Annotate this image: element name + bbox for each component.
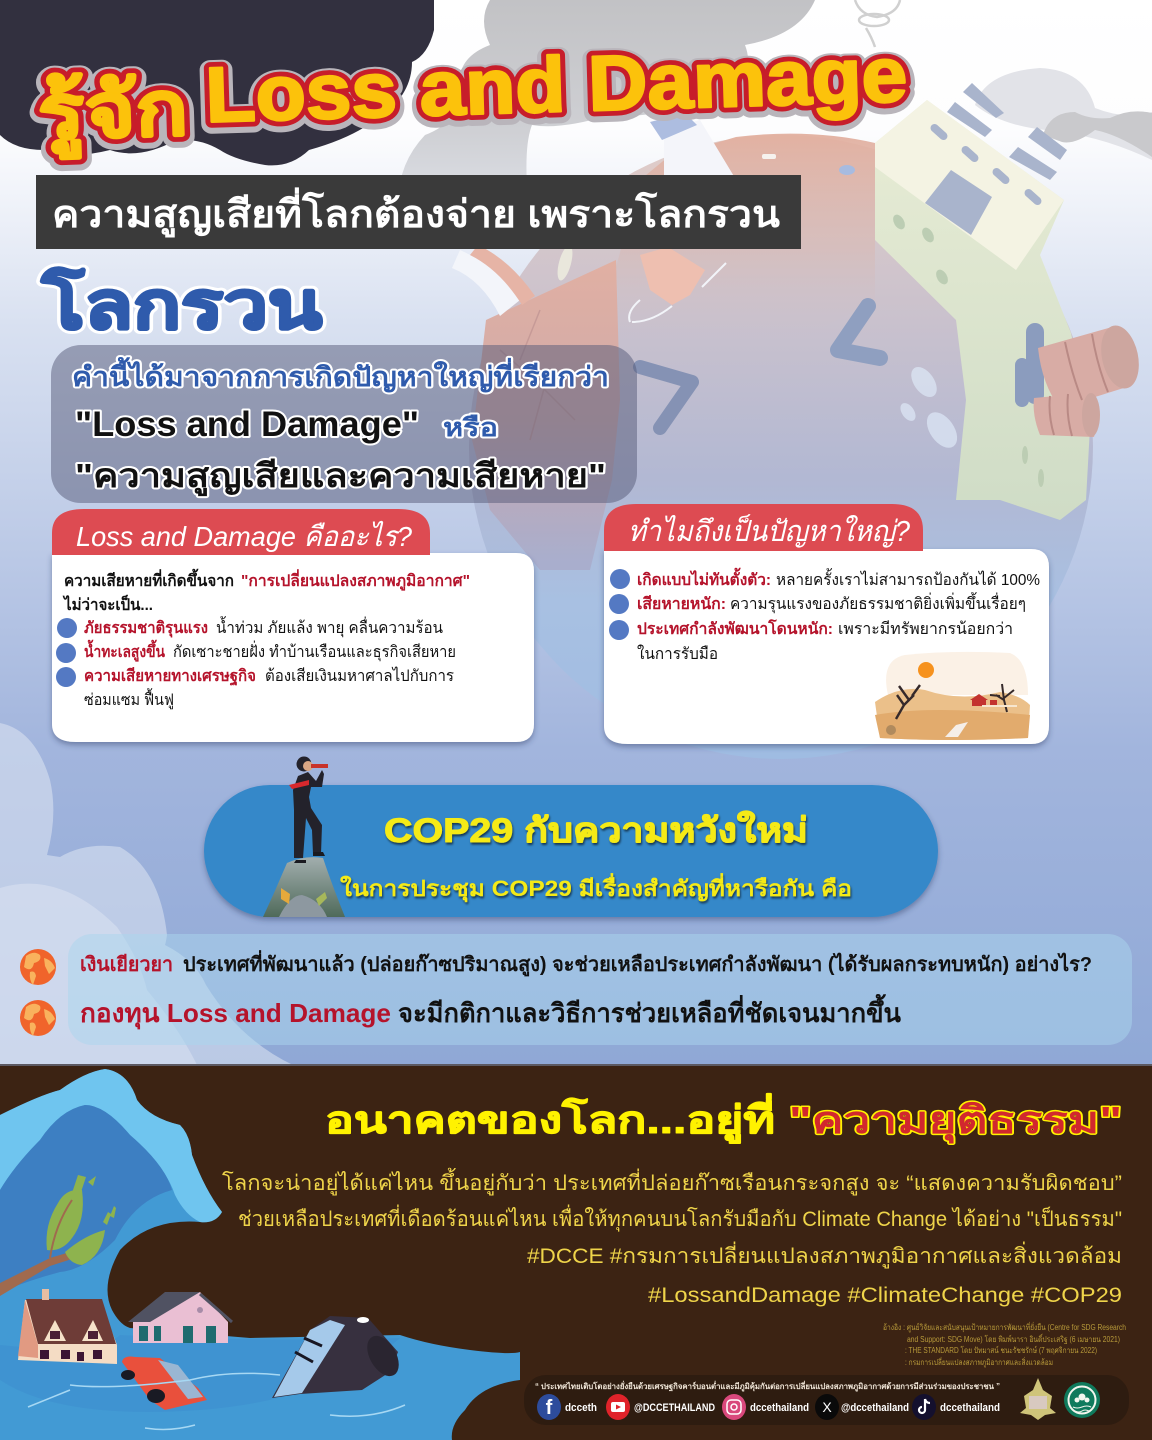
tree (0, 1175, 116, 1296)
icon: youtube (606, 1394, 630, 1420)
panel: why it is a big problem: ความรุนแรงของภัยธรรมชาติยิ่งเพิ่มขึ้นเรื่อยๆ (730, 592, 1026, 614)
icon: department seal (1064, 1382, 1100, 1418)
references (883, 1321, 1126, 1368)
panel: intro: หรือ (443, 414, 498, 442)
heading: global boiling: โลกรวน (41, 266, 322, 342)
title: Loss and Damage (204, 30, 908, 139)
icon: globe 2 (20, 1000, 56, 1036)
highlights on globe (897, 362, 963, 453)
card (52, 553, 534, 742)
panel: what is loss and damage: ความเสียหายทางเศรษฐกิจ (84, 666, 256, 686)
panel: COP29 topics: เงินเยียวยา (80, 953, 173, 976)
globe (452, 83, 1144, 759)
title: รู้จัก (37, 68, 189, 162)
factory marks (925, 83, 1067, 235)
panel: why it is a big problem: ประเทศกำลังพัฒนาโดนหนัก: (637, 618, 833, 638)
footer bar: dcceth (565, 1402, 597, 1414)
icon: tornado (855, 0, 900, 47)
background (0, 0, 1152, 1070)
footer bar: “ ประเทศไทยเติบโตอย่างยั่งยืนด้วยเศรษฐกิจคาร์บอนต่ำและมีภูมิคุ้มกันต่อการเปลี่ยนแปลงสภาพภูมิอากาศด้วยการมีส่วนร่วมของประชาชน ” (535, 1380, 1000, 1392)
heading (325, 1093, 1122, 1144)
body text: ช่วยเหลือประเทศที่เดือดร้อนแค่ไหน เพื่อให้ทุกคนบนโลกรับมือกับ Climate Change ได้อย่าง "เป็นธรรม" (238, 1204, 1122, 1232)
panel: what is loss and damage: ภัยธรรมชาติรุนแรง (84, 619, 208, 638)
footer bar: @DCCETHAILAND (634, 1402, 715, 1414)
panel: what is loss and damage: ต้องเสียเงินมหาศาลไปกับการ (265, 666, 454, 685)
card (604, 549, 1049, 744)
title: Loss and Damage (204, 30, 908, 139)
panel: why it is a big problem: ทำไมถึงเป็นปัญหาใหญ่? (628, 514, 911, 548)
water ripples (28, 1373, 405, 1429)
icon: ministry emblem (1020, 1378, 1056, 1420)
tab (604, 504, 923, 551)
smoke clouds (398, 0, 1152, 220)
heading: อนาคตของโลก...อยู่ที่ (325, 1093, 775, 1144)
panel: why it is a big problem: หลายครั้งเราไม่สามารถป้องกันได้ 100% (776, 568, 1040, 589)
panel: COP29 topics: กองทุน Loss and Damage (80, 998, 391, 1030)
land: red continent (452, 113, 875, 570)
house 1 (18, 1289, 117, 1364)
footer bar (524, 1375, 1129, 1425)
subtitle banner (36, 175, 801, 249)
panel: intro: "ความสูญเสียและความเสียหาย" (75, 457, 606, 497)
panel: what is loss and damage: ไม่ว่าจะเป็น... (62, 593, 153, 614)
panel: COP29 topics (20, 934, 1132, 1045)
subtitle banner: ความสูญเสียที่โลกต้องจ่าย เพราะโลกรวน (52, 187, 780, 238)
title: Loss and Damage (204, 32, 908, 141)
car: dark (272, 1316, 405, 1398)
icon: drought landscape (875, 652, 1030, 740)
arrows on globe (838, 306, 880, 358)
panel: what is loss and damage: น้ำทะเลสูงขึ้น (84, 639, 165, 663)
title: รู้จัก (37, 66, 189, 160)
panel: what is loss and damage: ความเสียหายที่เกิดขึ้นจาก (64, 568, 234, 590)
panel: why it is a big problem: เกิดแบบไม่ทันตั้งตัว: (637, 567, 771, 589)
bullets (609, 569, 630, 640)
panel: intro (51, 345, 637, 503)
panel: what is loss and damage: น้ำท่วม ภัยแล้ง พายุ คลื่นความร้อน (216, 616, 443, 638)
icon: businessman on rock (263, 756, 345, 917)
panel: future of the world (0, 1064, 1152, 1440)
panel: COP29: ในการประชุม COP29 มีเรื่องสำคัญที่หารือกัน คือ (340, 872, 852, 903)
footer bar: dccethailand (750, 1402, 809, 1414)
panel: COP29 topics: จะมีกติกาและวิธีการช่วยเหลือที่ชัดเจนมากขึ้น (398, 993, 901, 1028)
panel: why it is a big problem: ในการรับมือ (637, 644, 718, 663)
references: : THE STANDARD โดย ปัทมาสน์ ชนะรัชชรักษ์ (7 พฤศจิกายน 2022) (905, 1345, 1097, 1355)
body text: #LossandDamage #ClimateChange #COP29 (648, 1284, 1122, 1307)
footer bar: @dccethailand (841, 1402, 909, 1414)
panel: COP29: COP29 กับความหวังใหม่ (384, 810, 808, 850)
title (36, 30, 909, 162)
bullets (56, 618, 77, 687)
panel: COP29 (204, 756, 938, 917)
land: green continent (875, 100, 1090, 520)
tab (52, 509, 430, 555)
heading: "ความยุติธรรม" (789, 1100, 1122, 1144)
icon: facebook: f (546, 1397, 553, 1419)
footer bar: dccethailand (940, 1402, 1000, 1414)
car: red (121, 1357, 207, 1410)
panel: what is loss and damage: Loss and Damage คืออะไร? (76, 520, 412, 552)
panel: what is loss and damage: ซ่อมแซม ฟื้นฟู (84, 688, 174, 710)
panel: COP29 topics: ประเทศที่พัฒนาแล้ว (ปล่อยก๊าซปริมาณสูง) จะช่วยเหลือประเทศกำลังพัฒนา (ได้รับผลกระทบหนัก) อย่างไร? (183, 949, 1092, 978)
body text (222, 1168, 1122, 1307)
panel: why it is a big problem: เพราะมีทรัพยากรน้อยกว่า (838, 620, 1013, 638)
body text: #DCCE #กรมการเปลี่ยนแปลงสภาพภูมิอากาศและสิ่งแวดล้อม (527, 1241, 1122, 1269)
icon: facebook (537, 1394, 561, 1420)
icon: X: X (822, 1399, 832, 1415)
title: รู้จัก (37, 66, 189, 160)
panel: why it is a big problem (604, 504, 1049, 744)
panel: why it is a big problem: เสียหายหนัก: (637, 594, 726, 613)
panel: intro: "Loss and Damage" (75, 405, 419, 444)
house 2 (128, 1292, 232, 1343)
references: : กรมการเปลี่ยนแปลงสภาพภูมิอากาศและสิ่งแวดล้อม (905, 1356, 1053, 1368)
panel: intro: คำนี้ได้มาจากการเกิดปัญหาใหญ่ที่เรียกว่า (72, 356, 609, 393)
body text: โลกจะน่าอยู่ได้แค่ไหน ขึ้นอยู่กับว่า ประเทศที่ปล่อยก๊าซเรือนกระจกสูง จะ “แสดงความรับผิดชอบ” (222, 1168, 1122, 1196)
heading: global boiling: โลกรวน (41, 266, 322, 342)
icon: X (815, 1394, 839, 1420)
icon: globe 1 (20, 949, 56, 985)
flood illustration (0, 1069, 520, 1440)
panel: what is loss and damage: "การเปลี่ยนแปลงสภาพภูมิอากาศ" (241, 569, 470, 592)
barrels (1034, 322, 1144, 437)
panel: what is loss and damage: กัดเซาะชายฝั่ง ทำบ้านเรือนและธุรกิจเสียหาย (173, 640, 456, 662)
icon: tiktok (912, 1394, 936, 1420)
dark cloud (0, 0, 434, 165)
panel: what is loss and damage (52, 509, 534, 742)
lower-left clouds (0, 723, 293, 1065)
icon: instagram (722, 1394, 746, 1420)
